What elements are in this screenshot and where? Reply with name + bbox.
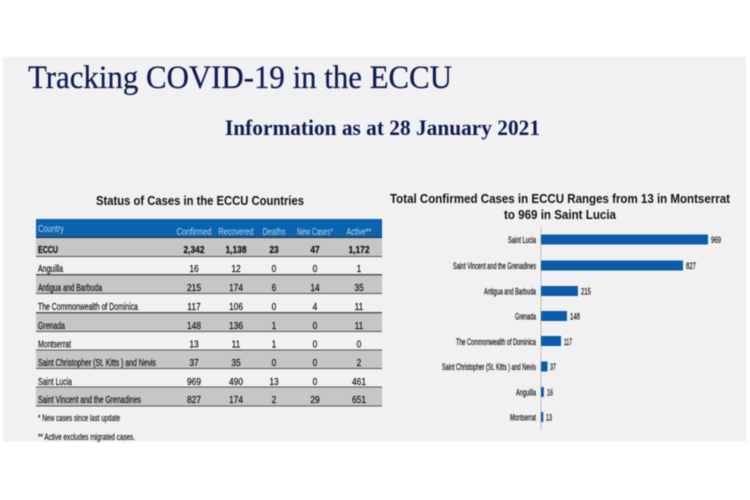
row: Grenada: 0: [313, 320, 317, 332]
chart heading: to 969 in Saint Lucia: [504, 207, 617, 222]
table heading: Status of Cases in the ECCU Countries: [96, 193, 304, 208]
row: ECCU: 1,138: [225, 244, 247, 256]
row: Montserrat: [36, 338, 382, 351]
panel: bar chart: [390, 191, 731, 430]
bar: Anguilla: 16: [547, 388, 553, 398]
row: Antigua and Barbuda: Antigua and Barbuda: [38, 282, 102, 294]
row: Saint Lucia: 0: [313, 376, 317, 388]
chart axis: [540, 227, 542, 430]
row: Montserrat: 0: [357, 339, 361, 351]
panel: status table: [36, 193, 382, 442]
row: Grenada: 148: [187, 320, 201, 332]
row: Montserrat: Montserrat: [38, 338, 71, 350]
row: Anguilla: 16: [189, 263, 199, 275]
bar: Saint Lucia: 969: [711, 235, 721, 246]
row: The Commonwealth of Dominica: 11: [355, 301, 363, 313]
table header row: Country: [38, 224, 64, 235]
row: Grenada: [36, 314, 382, 332]
row: Grenada: 1: [272, 320, 276, 332]
row: ECCU: 47: [310, 244, 320, 256]
bar: Saint Lucia: Saint Lucia: [508, 235, 536, 246]
title: Tracking COVID-19 in the ECCU: [28, 60, 452, 96]
row: Anguilla: 12: [231, 263, 241, 275]
chart heading: [390, 191, 731, 222]
bar: The Commonwealth of Dominica: 117: [564, 337, 572, 348]
row: The Commonwealth of Dominica: 117: [187, 301, 201, 313]
row: Saint Lucia: Saint Lucia: [38, 376, 72, 388]
row: Saint Vincent and the Grenadines: 174: [229, 394, 243, 406]
row: Antigua and Barbuda: 35: [354, 282, 364, 294]
row: Saint Christopher (St. Kitts) and Nevis: 0: [272, 357, 276, 369]
row: ECCU: 1,172: [348, 244, 370, 256]
bar: Montserrat: Montserrat: [510, 412, 536, 424]
row: Saint Christopher (St. Kitts) and Nevis: 37: [189, 357, 199, 369]
row: Saint Lucia: [36, 376, 382, 388]
bar: Anguilla: Anguilla: [516, 388, 536, 398]
row: Antigua and Barbuda: 174: [229, 282, 243, 294]
row: Montserrat: 11: [232, 339, 240, 351]
row: Antigua and Barbuda: [36, 276, 382, 294]
row: Grenada: 136: [229, 320, 243, 332]
row: Saint Christopher (St. Kitts) and Nevis: [36, 350, 382, 369]
subtitle: date: Information as at 28 January 2021: [225, 115, 540, 140]
row: Saint Christopher (St. Kitts) and Nevis: Saint Christopher (St. Kitts ) and Nevis: [38, 357, 156, 369]
bar: Grenada: 148: [570, 312, 580, 322]
row: Antigua and Barbuda: 215: [187, 282, 201, 294]
row: ECCU: ECCU: [38, 244, 58, 256]
row: Saint Vincent and the Grenadines: 2: [272, 394, 276, 406]
row: Saint Lucia: 969: [187, 376, 201, 388]
bar: Saint Christopher (St. Kitts) and Nevis: Saint Christopher (St. Kitts ) and Nevis: [442, 362, 536, 373]
bar: Saint Vincent and the Grenadines: 827: [686, 261, 696, 272]
row: Anguilla: 0: [272, 263, 276, 275]
row: Montserrat: 13: [189, 339, 199, 351]
table header row: Active**: [346, 227, 372, 238]
row: Montserrat: 0: [313, 339, 317, 351]
row: Anguilla: 0: [313, 263, 317, 275]
row: Grenada: 11: [355, 320, 363, 332]
row: Grenada: Grenada: [38, 320, 65, 332]
row: ECCU: [36, 238, 382, 257]
bar: Antigua and Barbuda: Antigua and Barbuda: [484, 286, 536, 298]
row: The Commonwealth of Dominica: 106: [229, 301, 243, 313]
footnote: new cases: * New cases since last update: [38, 413, 120, 423]
row: Saint Vincent and the Grenadines: Saint Vincent and the Grenadines: [38, 394, 141, 406]
footnote: active cases: ** Active excludes migrated cases.: [38, 432, 135, 442]
row: The Commonwealth of Dominica: [36, 301, 382, 314]
row: Saint Christopher (St. Kitts) and Nevis: 35: [231, 357, 241, 369]
table header row: Deaths: [262, 227, 286, 238]
table header row: New Cases*: [297, 227, 333, 238]
row: Antigua and Barbuda: 14: [310, 282, 320, 294]
row: The Commonwealth of Dominica: 4: [313, 301, 317, 313]
row: Antigua and Barbuda: 6: [272, 282, 276, 294]
background panel: [3, 57, 746, 442]
row: Saint Christopher (St. Kitts) and Nevis: 0: [313, 357, 317, 369]
row: ECCU: 23: [269, 244, 279, 256]
table header row: Recovered: [218, 227, 254, 238]
bar: Saint Christopher (St. Kitts) and Nevis: [442, 362, 556, 373]
bar: Antigua and Barbuda: 215: [581, 286, 591, 298]
table header row: [36, 219, 382, 238]
row: Saint Vincent and the Grenadines: 827: [187, 394, 201, 406]
row: Saint Christopher (St. Kitts) and Nevis: 2: [357, 357, 361, 369]
row: Saint Lucia: 461: [352, 376, 366, 388]
row: ECCU: 2,342: [183, 244, 205, 256]
row: Saint Lucia: 490: [229, 376, 243, 388]
row: Saint Vincent and the Grenadines: [36, 388, 382, 406]
row: Anguilla: [36, 263, 382, 276]
row: Saint Vincent and the Grenadines: 29: [310, 394, 320, 406]
bar: Saint Vincent and the Grenadines: Saint Vincent and the Grenadines: [453, 261, 536, 272]
table header row: Confirmed: [176, 227, 212, 238]
row: Saint Lucia: 13: [269, 376, 279, 388]
row: Montserrat: 1: [272, 339, 276, 351]
bar: Saint Vincent and the Grenadines: [453, 260, 696, 272]
bar: Saint Lucia: [508, 234, 721, 246]
bar: Montserrat: 13: [546, 412, 552, 424]
bar: The Commonwealth of Dominica: The Commonwealth of Dominica: [456, 337, 536, 348]
row: Anguilla: 1: [357, 263, 361, 275]
bar: Grenada: Grenada: [515, 312, 536, 322]
row: Saint Vincent and the Grenadines: 651: [352, 394, 366, 406]
row: Anguilla: Anguilla: [38, 263, 63, 275]
row: The Commonwealth of Dominica: 0: [272, 301, 276, 313]
bar: Grenada: [515, 311, 580, 322]
row: The Commonwealth of Dominica: The Commonwealth of Dominica: [38, 301, 138, 313]
bar: Saint Christopher (St. Kitts) and Nevis: 37: [550, 362, 556, 373]
